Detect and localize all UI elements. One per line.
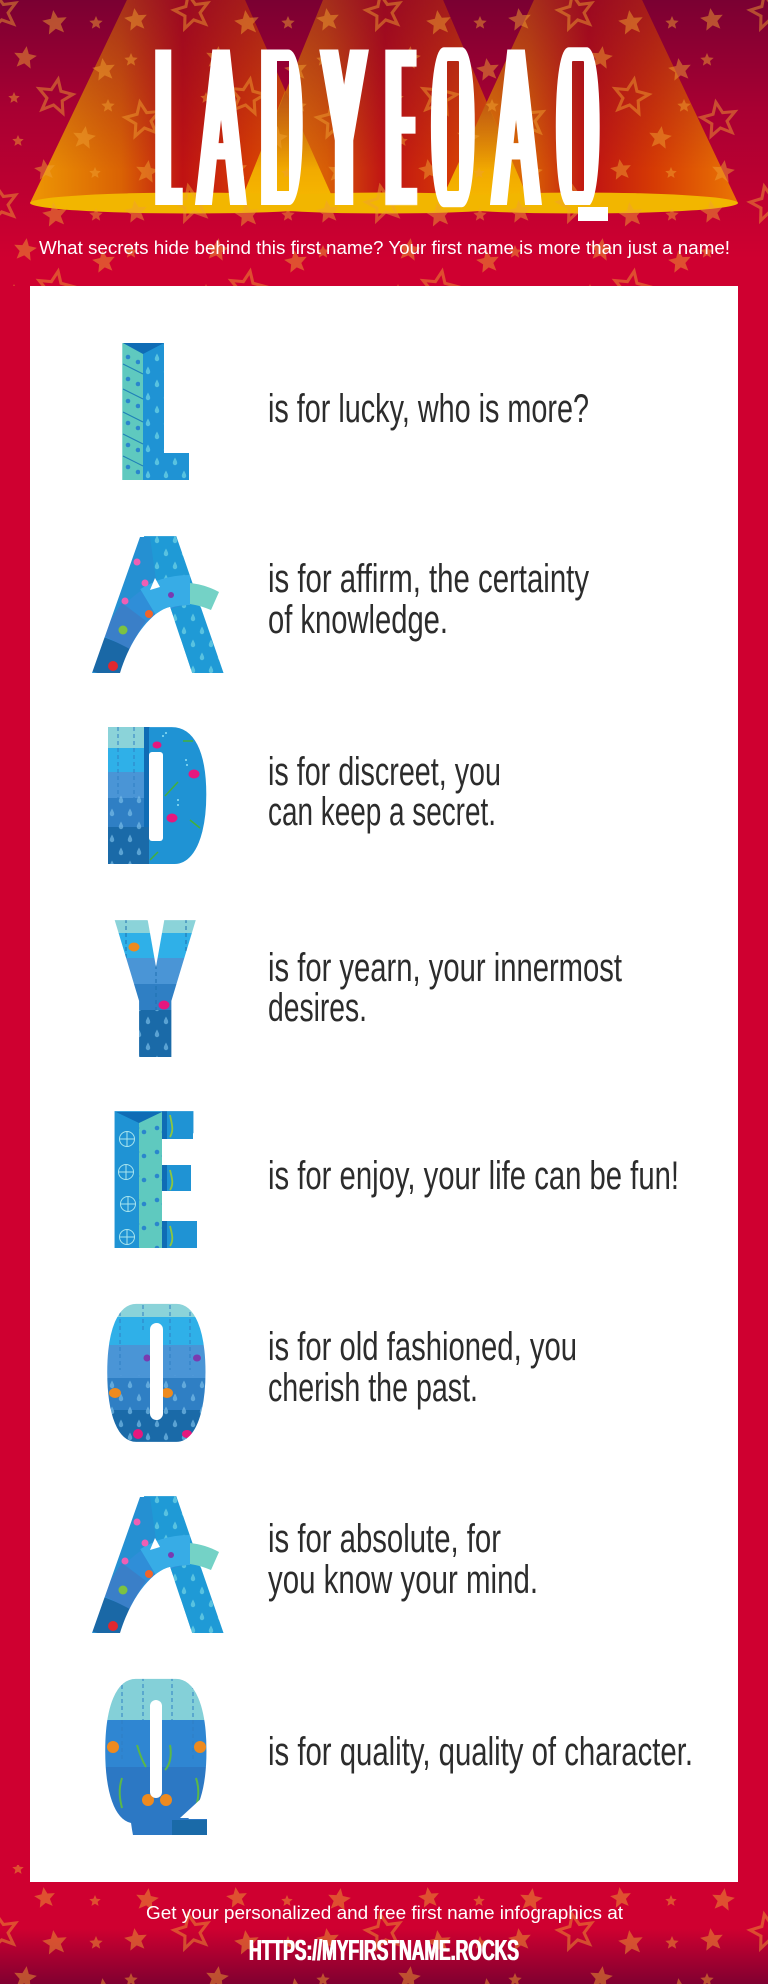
text: A: of knowledge. <box>268 598 448 642</box>
title: O <box>438 1 468 254</box>
text: A second <box>268 1517 538 1602</box>
title: E <box>389 2 412 254</box>
icon: letter A (second) <box>70 1480 240 1650</box>
text: Y: is for yearn, your innermost <box>268 946 622 990</box>
icon: letter D <box>108 727 206 864</box>
text: D: is for discreet, you <box>268 750 501 794</box>
text: A second: you know your mind. <box>268 1558 538 1602</box>
icon: letter Y <box>114 920 196 1057</box>
star pattern: bottom <box>0 1865 768 1984</box>
icon: letter L <box>122 343 189 480</box>
white content panel <box>30 286 738 1882</box>
star pattern: top <box>0 0 768 286</box>
text: L: is for lucky, who is more? <box>268 387 589 431</box>
text: A second: is for absolute, for <box>268 1517 501 1561</box>
text: A: is for affirm, the certainty <box>268 557 589 601</box>
text: O: cherish the past. <box>268 1366 478 1410</box>
footer text: Get your personalized and free first name infographics at <box>146 1903 623 1923</box>
title: A <box>495 2 537 254</box>
title: Q <box>563 1 593 254</box>
title: Y <box>324 0 364 253</box>
footer url: HTTPS://MYFIRSTNAME.ROCKS <box>249 1935 519 1967</box>
title: A <box>200 2 242 254</box>
text: O: is for old fashioned, you <box>268 1325 577 1369</box>
text: O <box>268 1325 577 1410</box>
text: Y <box>268 946 622 1030</box>
title <box>155 47 600 208</box>
icon: letter Q <box>105 1678 207 1835</box>
text: A <box>268 557 589 642</box>
spotlight beams <box>30 0 738 214</box>
icon: letter A <box>70 520 240 690</box>
text: Y: desires. <box>268 986 367 1030</box>
subtitle: What secrets hide behind this first name? Your first name is more than just a name! <box>39 238 730 258</box>
icon: letter O <box>107 1304 206 1442</box>
text: D <box>268 750 501 834</box>
title: D <box>267 2 296 254</box>
title: L <box>159 2 177 254</box>
text: D: can keep a secret. <box>268 790 496 834</box>
title Q tail <box>578 207 608 221</box>
icon: letter E <box>114 1111 197 1248</box>
